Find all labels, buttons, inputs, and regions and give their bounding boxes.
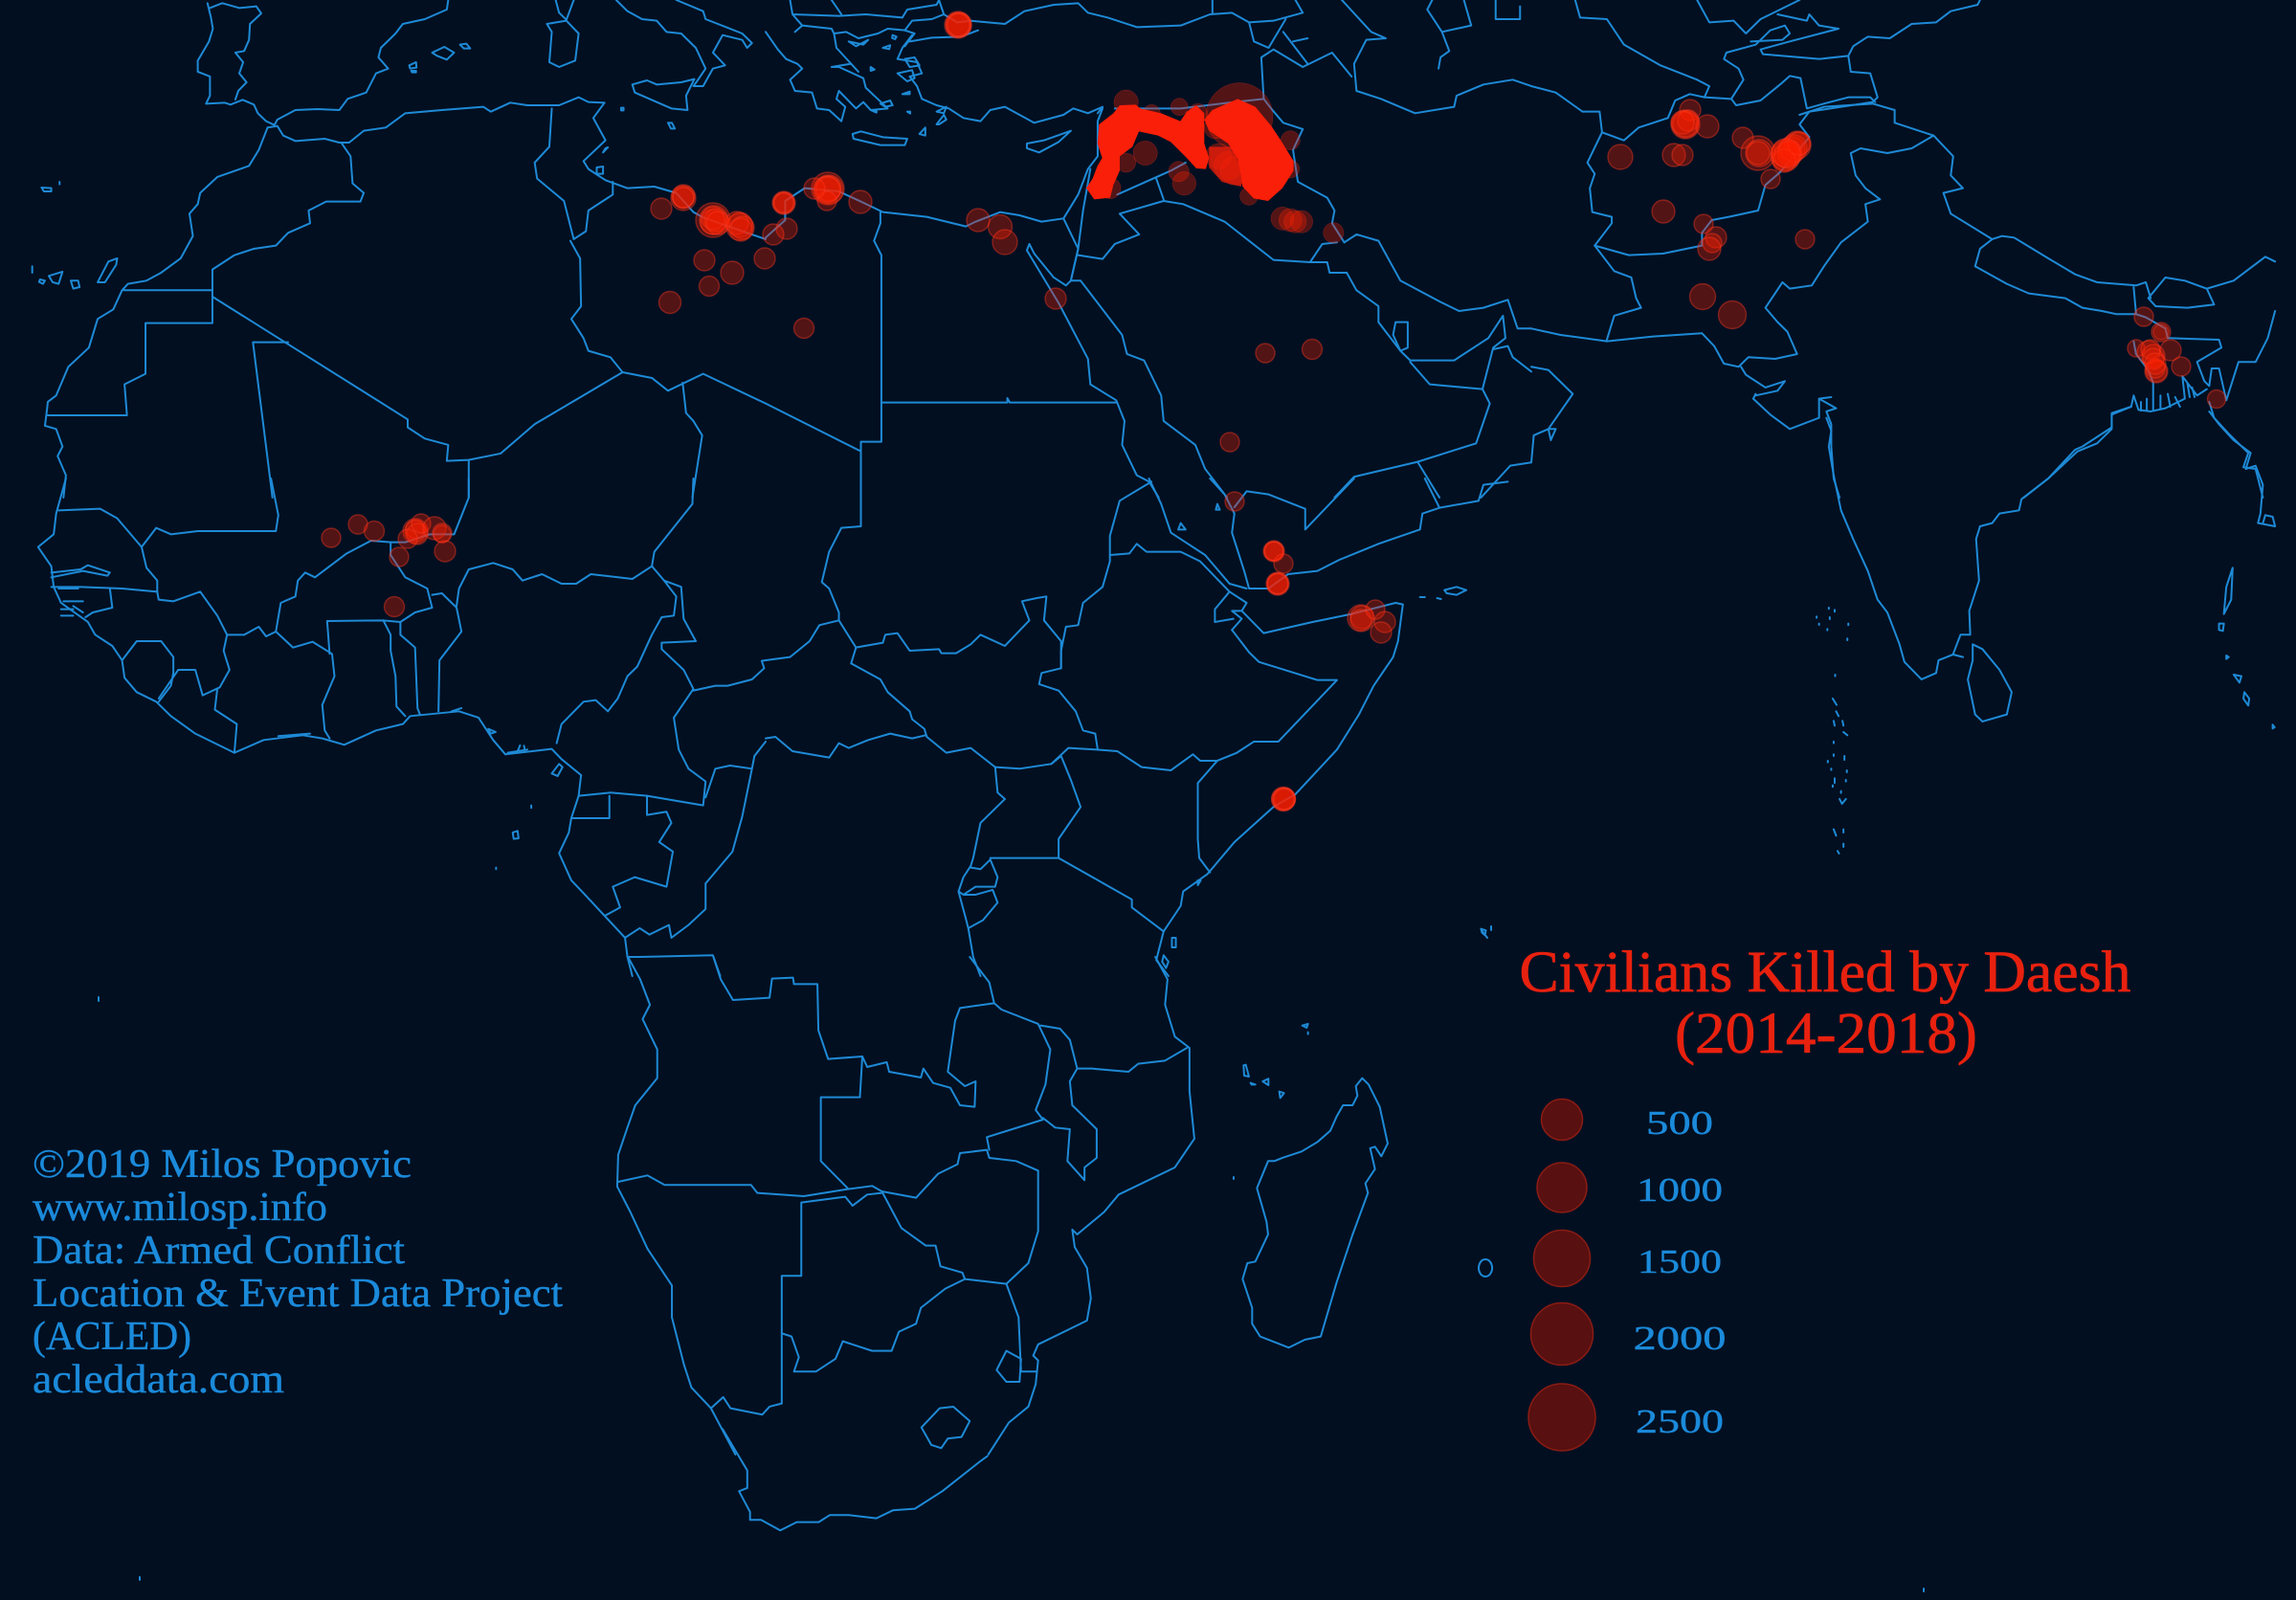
bubble: Istanbul [945,11,971,38]
bubbles: Saudi Arabia and Yemen [1220,339,1323,595]
bubbles: Afghanistan and Pakistan [1608,100,1815,329]
legend item: 500: 500 [1646,1104,1713,1142]
outlines: East Africa and Horn [766,478,1508,976]
bubbles: Bangladesh and Myanmar [2128,307,2226,408]
title: Civilians Killed by Daesh [1520,941,2130,1005]
bubbles: civilians killed [322,11,2226,811]
outlines: Cape coast and Lesotho [723,1407,988,1530]
bubbles: Mali, Niger and Burkina Faso [322,514,456,616]
credits text block [33,1143,563,1402]
bubbles: Somalia [1271,600,1395,811]
credits text block: www.milosp.info [33,1186,327,1230]
legend [1528,1099,1727,1451]
title [1520,941,2130,1066]
credits text block: ©2019 Milos Popovic [33,1143,412,1187]
legend item: 1000: 1000 [1637,1171,1723,1209]
credits text block: Data: Armed Conflict [33,1229,405,1273]
outlines: West Africa [38,478,766,976]
legend item: 2000 [1531,1303,1727,1365]
outlines: Southern Africa [617,957,1194,1455]
legend item: 500 [1541,1099,1713,1142]
legend item: 1500 [1533,1231,1722,1286]
outlines: Iberia, Italy and Maghreb [33,0,766,498]
legend item: 2000: 2000 [1633,1320,1727,1357]
credits text block: acleddata.com [33,1358,284,1402]
red core: Syria band [1086,104,1209,199]
outlines: Madagascar and nearby islands [1234,1024,1388,1347]
outlines: Balkans, Middle East and Arabia [766,0,1531,498]
outlines: South India and island chains [1817,407,2275,854]
bubbles: Libya and Egypt [651,172,1066,339]
legend item: 2500 [1528,1384,1724,1451]
red core: mid overlap [1209,146,1244,187]
credits text block: Location & Event Data Project [33,1272,563,1316]
bubbles: Syria and Iraq cluster [1086,83,1344,243]
red core: Iraq band [1204,99,1294,201]
legend item: 1500: 1500 [1638,1243,1722,1280]
outlines: Central and South Asia [1531,0,2275,498]
legend item: 1000 [1537,1163,1723,1212]
outlines: small outlying islands [99,926,1924,1591]
credits text block: (ACLED) [33,1315,191,1359]
legend item: 2500: 2500 [1636,1403,1724,1440]
title: (2014-2018) [1675,1002,1977,1066]
